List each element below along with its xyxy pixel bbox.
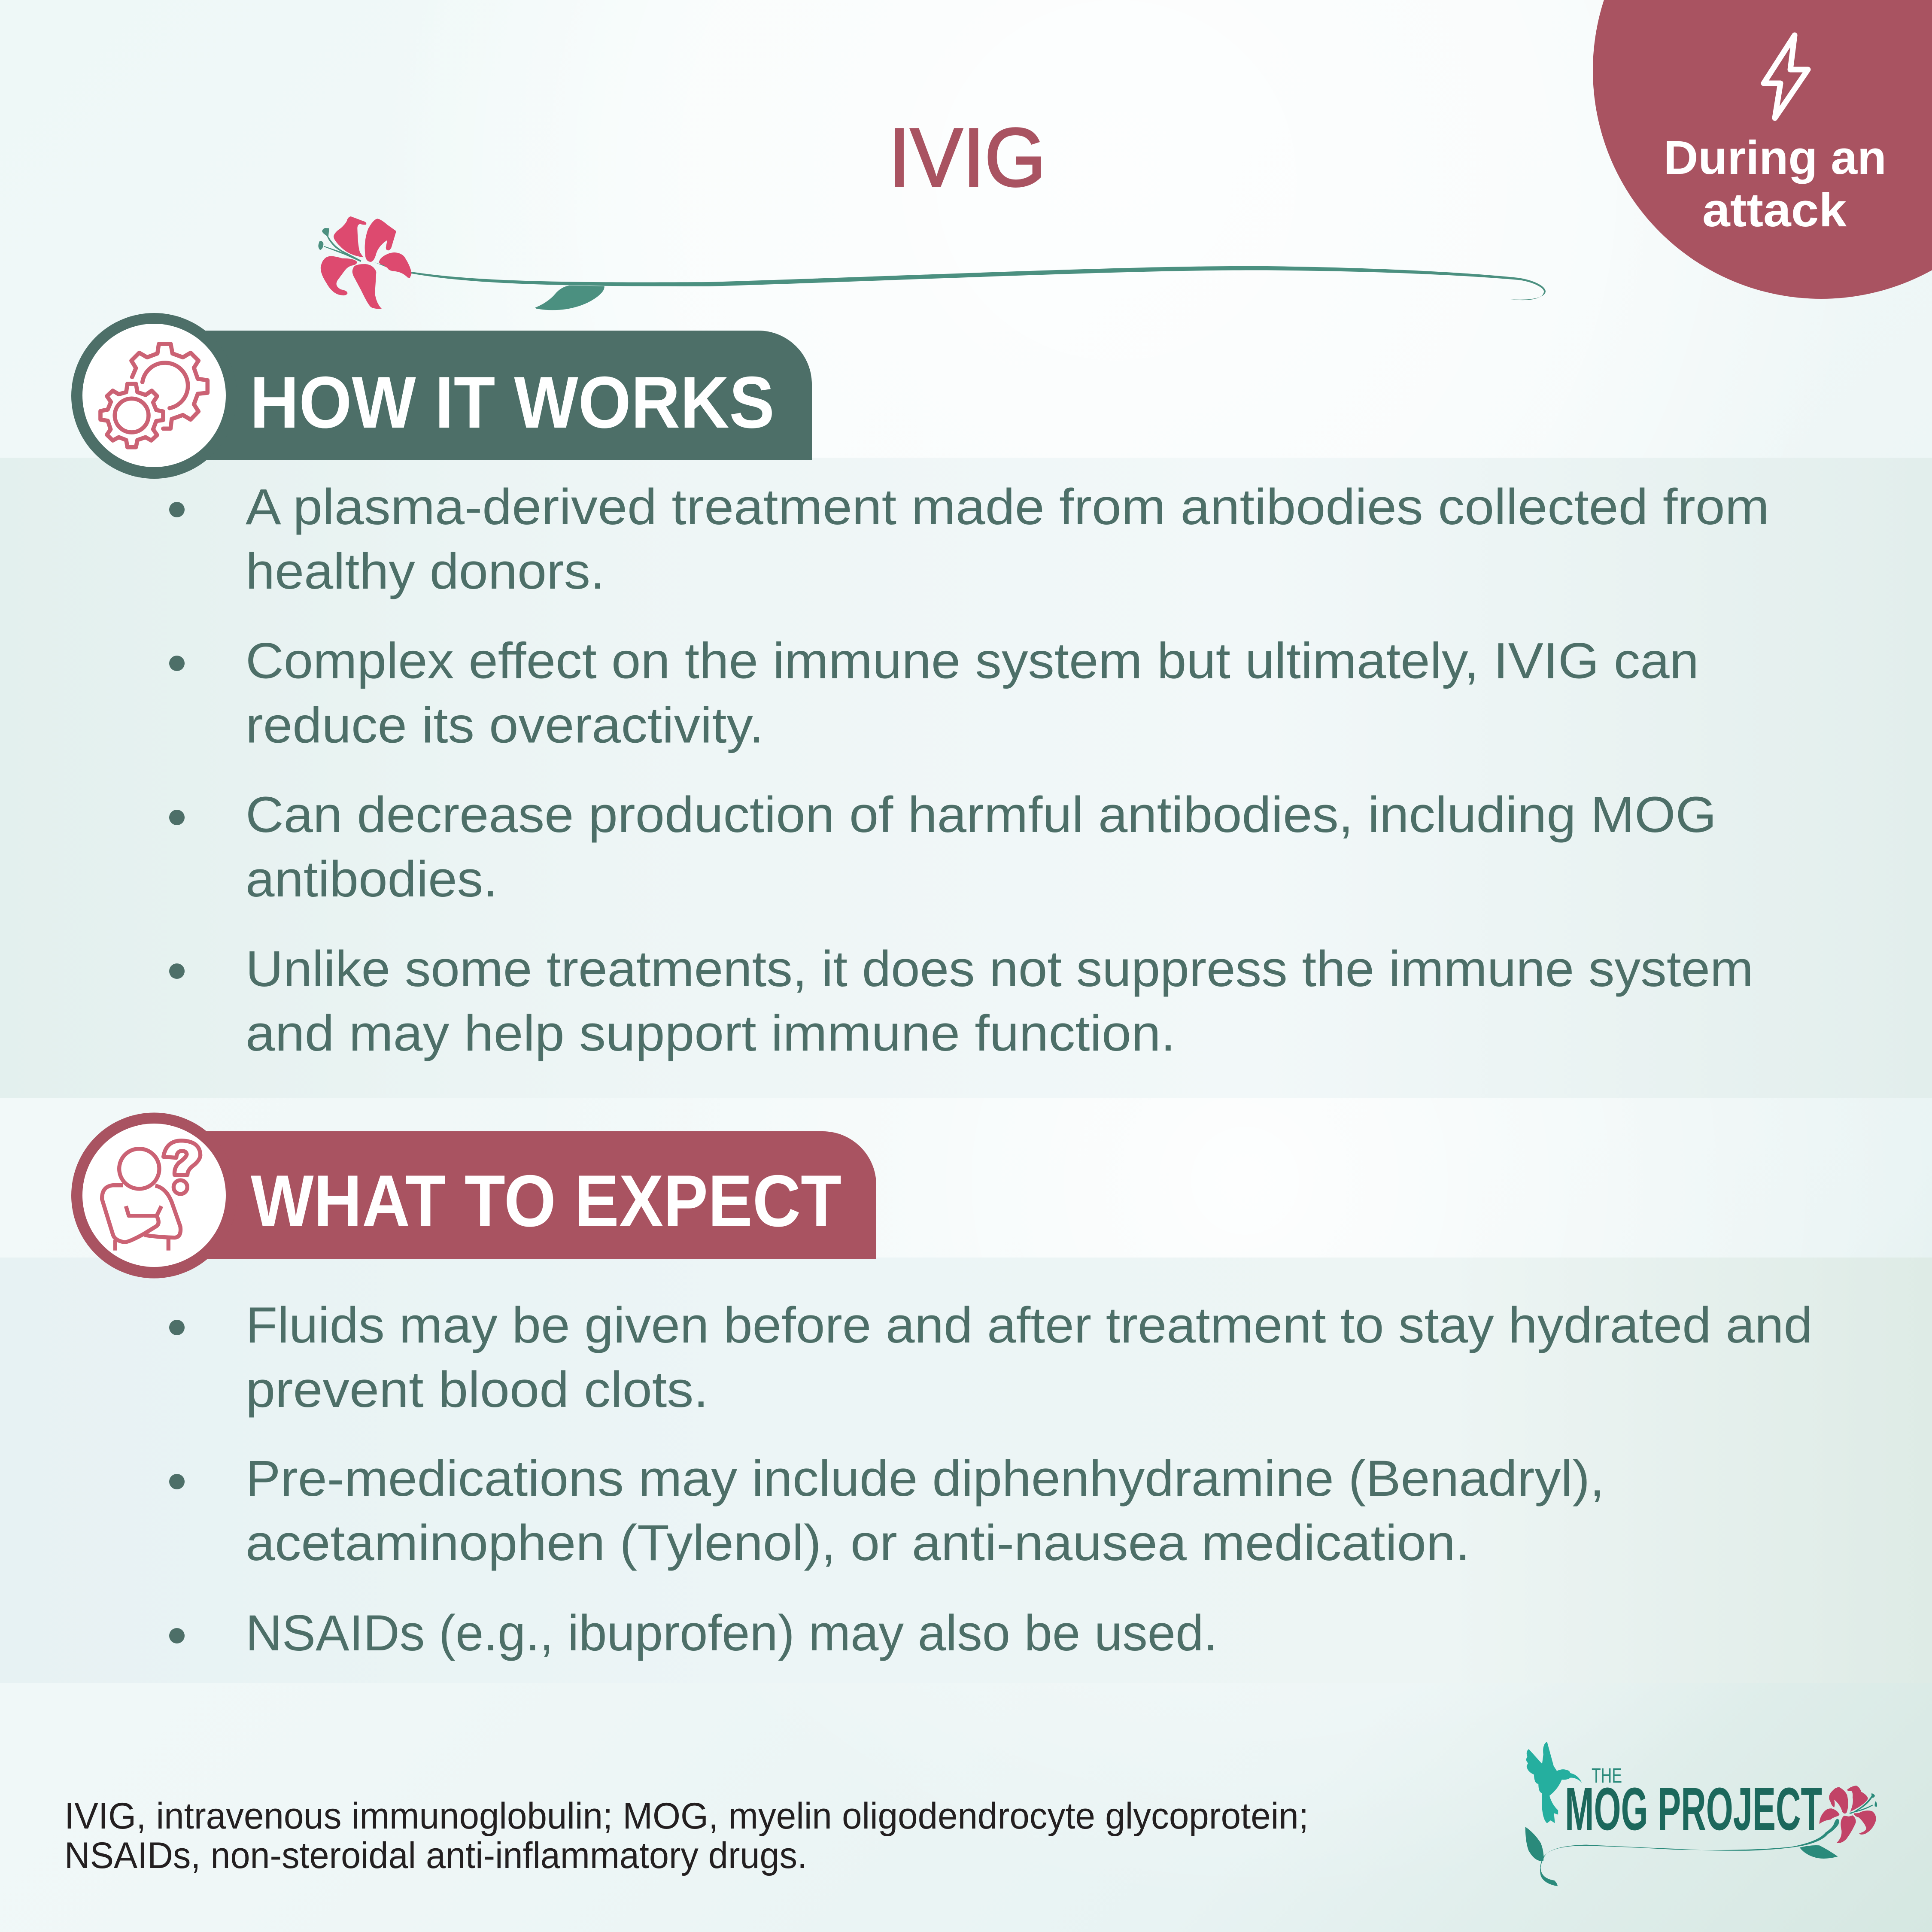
icon: gears (100, 344, 207, 447)
badge label (1664, 131, 1886, 237)
badge label: During an (1664, 131, 1886, 184)
stem (411, 266, 1546, 300)
bullet item: harmful antibodies: antibodies. (246, 851, 498, 908)
bullet item: immune effect (169, 633, 1699, 754)
panel: how it works body (0, 458, 1932, 1098)
logo wordmark (1565, 1765, 1822, 1843)
bullet item: plasma-derived (169, 479, 1769, 600)
flower and leaf (318, 216, 605, 310)
bullet item: fluids: Fluids may be given before and after treatment to stay hydrated and (246, 1297, 1813, 1354)
logo artwork (1525, 1742, 1877, 1886)
bullet item: immune effect: Complex effect on the immune system but ultimately, IVIG can (246, 633, 1699, 690)
heading text: HOW IT WORKS (250, 361, 775, 444)
bullet item: NSAIDs: NSAIDs (e.g., ibuprofen) may also be used. (246, 1605, 1218, 1662)
flower divider (318, 216, 1546, 310)
heading: how it works (71, 313, 812, 479)
bullet item: immune effect: reduce its overactivity. (246, 697, 764, 754)
icon: lightning bolt (1764, 35, 1808, 118)
bullet item: harmful antibodies (169, 787, 1716, 908)
heading: what to expect (71, 1113, 876, 1279)
bullet item: fluids: prevent blood clots. (246, 1361, 708, 1418)
bullet item: harmful antibodies: Can decrease production of harmful antibodies, including MOG (246, 787, 1716, 843)
footnote: NSAIDs, non-steroidal anti-inflammatory drugs. (64, 1835, 807, 1876)
badge: during an attack (1593, 0, 1932, 299)
logo wordmark: THE (1592, 1765, 1622, 1787)
bullet item: pre-medications: Pre-medications may include diphenhydramine (Benadryl), (246, 1450, 1604, 1507)
bullet item: plasma-derived: A plasma-derived treatment made from antibodies collected from (246, 479, 1769, 535)
bullet item: plasma-derived: healthy donors. (246, 543, 605, 600)
title: IVIG (888, 111, 1046, 204)
bullet item: immune support: and may help support immune function. (246, 1005, 1176, 1062)
badge label: attack (1702, 184, 1847, 237)
logo: the mog project (1525, 1742, 1877, 1886)
bullet item: pre-medications (169, 1450, 1604, 1571)
footnote (64, 1795, 1309, 1876)
bullet item: immune support: Unlike some treatments, it does not suppress the immune system (246, 941, 1753, 997)
icon: person with question mark (102, 1141, 200, 1251)
bullet item: immune support (169, 941, 1753, 1062)
bullet item: pre-medications: acetaminophen (Tylenol), or anti-nausea medication. (246, 1515, 1470, 1571)
footnote: IVIG, intravenous immunoglobulin; MOG, myelin oligodendrocyte glycoprotein; (64, 1795, 1309, 1837)
bullet item: fluids (169, 1297, 1813, 1418)
heading text: WHAT TO EXPECT (251, 1160, 841, 1242)
panel: what to expect body (0, 1258, 1932, 1683)
